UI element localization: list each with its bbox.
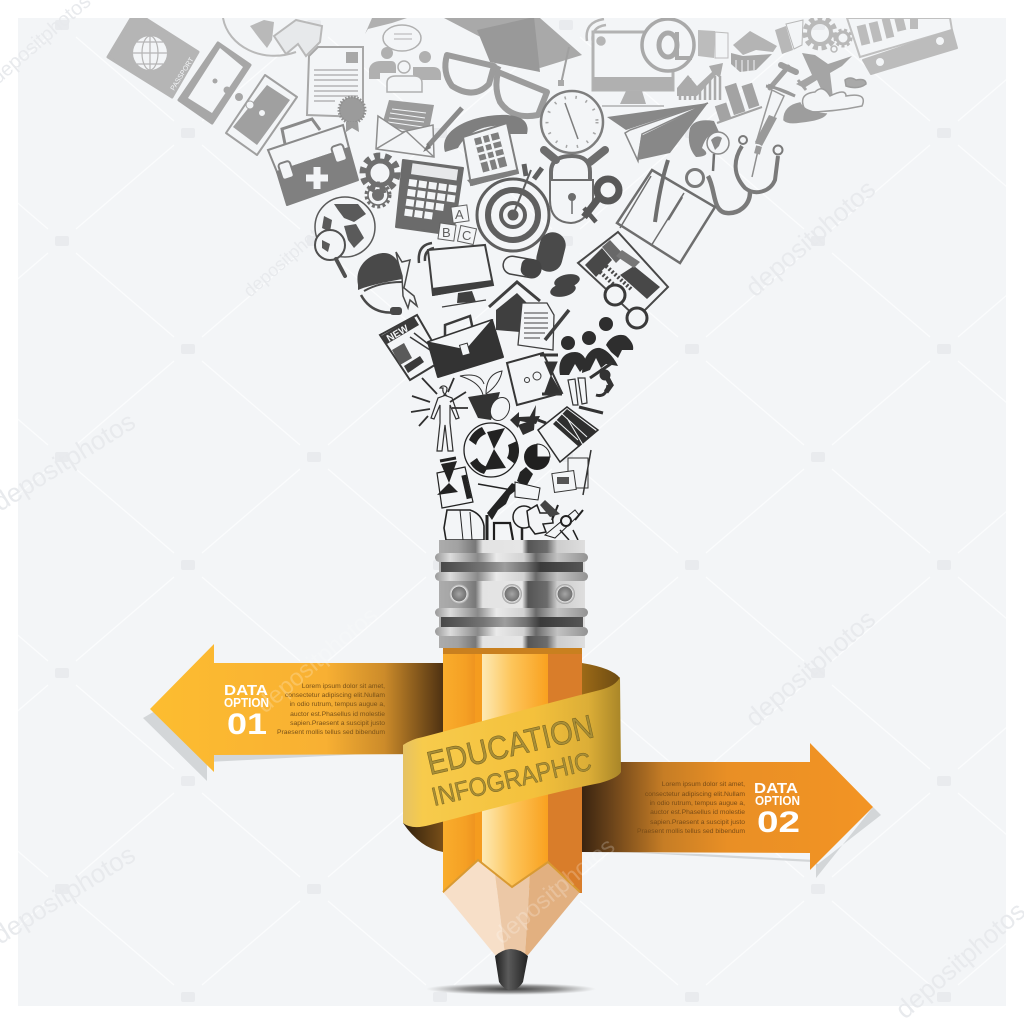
icon: safe with hourglass xyxy=(507,353,562,405)
pencil body xyxy=(443,648,582,893)
icon: people with speech bubble xyxy=(365,18,441,92)
watermark text: depositphotos xyxy=(240,212,337,301)
icon: folders xyxy=(775,20,803,54)
icon: padlock with chain xyxy=(544,150,605,223)
icon: calendar spreadsheet xyxy=(538,407,598,462)
pencil xyxy=(435,540,588,990)
icon: paper plane xyxy=(607,103,708,161)
arrow 02 xyxy=(582,743,873,870)
pencil ferrule xyxy=(435,540,588,648)
banner subtitle: INFOGRAPHIC xyxy=(429,746,594,812)
icon: gears xyxy=(363,156,397,207)
icon: brain with magnifier xyxy=(689,120,729,171)
arrow 02 body text: in odio rutrum, tempus augue a, xyxy=(650,800,745,807)
icon: small mixed tools xyxy=(540,500,583,540)
icon: pen xyxy=(423,108,462,152)
pencil wood tip xyxy=(443,860,580,955)
pencil zigzag edge xyxy=(443,860,580,892)
icon: laptop with chart xyxy=(847,17,957,74)
arrow 01 label: OPTION xyxy=(224,695,269,710)
icon: computer monitor xyxy=(593,32,673,106)
icon: at sign xyxy=(642,19,694,71)
arrow 02 body text: Praesent mollis tellus sed bibendum xyxy=(637,828,745,835)
right arrow shadow xyxy=(620,807,881,878)
arrow 02 label: DATA xyxy=(754,780,798,797)
icon: smartphone xyxy=(226,75,297,155)
icon: ABC blocks: C xyxy=(462,228,471,243)
icon: bar chart xyxy=(715,83,762,123)
arrow 02 body text: Lorem ipsum dolor sit amet, xyxy=(662,781,745,788)
icon: ABC blocks: B xyxy=(442,225,451,240)
icon: book xyxy=(444,510,487,540)
icon: wrench xyxy=(396,252,417,308)
icon: ABC blocks: A xyxy=(455,207,464,222)
arrow 01 label: 01 xyxy=(227,708,267,741)
icon: pills xyxy=(502,229,581,299)
icon: rising line chart xyxy=(677,63,723,100)
icon: clouds xyxy=(784,78,866,123)
icon: newspaper NEW: NEW xyxy=(385,323,411,345)
icon: calculator xyxy=(396,160,463,235)
icon: handshake xyxy=(731,31,777,72)
icon: globe with magnifier xyxy=(315,197,375,276)
arrow 01 body text xyxy=(277,683,385,736)
arrow 01 body text: auctor est.Phasellus id molestie xyxy=(290,711,385,718)
ground shadow xyxy=(426,983,596,995)
icon: wifi signal small xyxy=(419,243,437,263)
arrow 01 xyxy=(150,644,443,772)
ribbon tail xyxy=(403,808,443,852)
icon: desktop monitor xyxy=(428,245,493,307)
icon: compass clock xyxy=(541,91,603,153)
icon: passport: PASSPORT xyxy=(170,56,196,92)
icon: passport xyxy=(108,12,198,97)
arrow 01 body text: sapien.Praesent a suscipit justo xyxy=(290,720,385,727)
icon: graduation cap xyxy=(444,17,582,86)
pencil lead xyxy=(495,949,528,990)
ribbon banner xyxy=(403,677,621,827)
icon: documents xyxy=(698,30,728,58)
watermark over pencil: depositphotos xyxy=(252,602,383,719)
icon: glasses xyxy=(445,55,547,116)
arrow 02 body text: sapien.Praesent a suscipit justo xyxy=(650,819,745,826)
icon: business people xyxy=(559,317,633,375)
arrow 02 body text: auctor est.Phasellus id molestie xyxy=(650,809,745,816)
icon: microscope and test tubes xyxy=(568,363,612,413)
icon cloud: education icons splashing from pencil xyxy=(108,12,957,540)
icon: medical case xyxy=(268,119,358,205)
icon: telephone xyxy=(444,115,528,186)
ribbon back piece xyxy=(582,663,620,700)
watermark over pencil: depositphotos xyxy=(489,833,620,950)
arrow 01 body text: consectetur adipiscing elit.Nullam xyxy=(285,692,385,699)
icon: swirling arrows xyxy=(510,405,546,435)
arrow 01 body text: in odio rutrum, tempus augue a, xyxy=(290,701,385,708)
icon: ABC blocks xyxy=(438,205,476,244)
icon: stethoscope xyxy=(686,136,782,213)
icon: document with pen xyxy=(518,303,569,350)
icon: airplane xyxy=(796,53,852,95)
arrow 02 body text: consectetur adipiscing elit.Nullam xyxy=(645,791,745,798)
icon: newspaper with magnifiers xyxy=(578,232,668,328)
arrow 01 label: DATA xyxy=(224,682,268,699)
icon: recycling hourglass circle xyxy=(464,423,519,477)
icon: human body with rays xyxy=(411,378,468,451)
watermark text: depositphotos xyxy=(739,174,881,303)
icon: newspaper NEW xyxy=(380,315,443,380)
icon: certificate document xyxy=(307,47,365,132)
icon: potted plant xyxy=(460,371,513,424)
icon: magnifier with cross xyxy=(513,505,553,540)
icon: settings gears xyxy=(805,18,851,52)
icon: globe and recycle xyxy=(223,18,322,56)
icon: syringe xyxy=(752,65,796,177)
icon: wrench and screwdriver tools xyxy=(478,467,540,520)
icon: pie chart xyxy=(524,444,550,470)
arrow 02 label: 02 xyxy=(757,806,800,839)
icon: office documents xyxy=(552,450,591,495)
icon: wifi signal xyxy=(587,19,606,44)
arrow 02 label xyxy=(754,780,800,839)
icon: target with dart xyxy=(477,164,549,251)
icon: open envelope with letter xyxy=(376,100,434,157)
banner title: EDUCATION xyxy=(423,708,597,782)
icon: briefcase xyxy=(428,316,503,377)
watermark text: depositphotos xyxy=(739,604,881,733)
icon: notebook with pen xyxy=(617,160,715,263)
arrow 01 body text: Lorem ipsum dolor sit amet, xyxy=(302,683,385,690)
icon: key xyxy=(584,179,619,222)
arrow 01 label xyxy=(224,682,269,741)
left arrow shadow xyxy=(143,711,405,781)
icon: box xyxy=(494,523,513,540)
icon: tablet xyxy=(179,43,250,123)
watermark over pencil xyxy=(252,602,620,950)
arrow 01 body text: Praesent mollis tellus sed bibendum xyxy=(277,729,385,736)
icon: hard hat xyxy=(357,253,402,315)
arrow 02 body text xyxy=(637,781,745,835)
icon: house xyxy=(489,282,540,332)
arrow 02 label: OPTION xyxy=(755,793,800,808)
icon: hourglass notebook xyxy=(437,458,473,508)
